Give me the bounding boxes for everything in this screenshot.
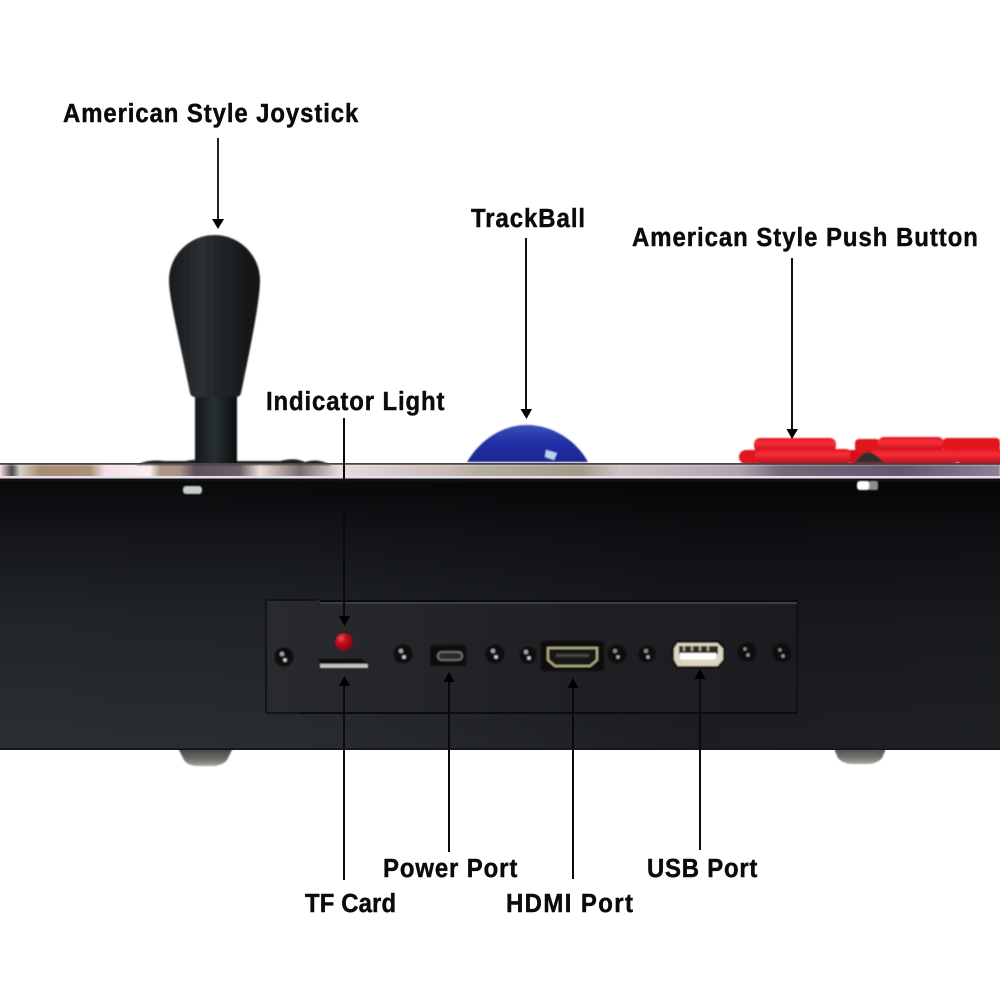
label: USB Port: USB Port xyxy=(647,854,758,883)
button group 2 xyxy=(850,437,1000,464)
port plate xyxy=(266,600,797,714)
USB port xyxy=(673,642,724,667)
arrow: power port xyxy=(444,672,454,852)
joystick shaft xyxy=(195,394,237,466)
red push buttons xyxy=(739,437,1000,464)
arrow: push button xyxy=(786,258,798,439)
joystick ball top xyxy=(169,235,260,397)
trackball xyxy=(467,425,588,462)
console body xyxy=(0,482,1000,750)
joystick xyxy=(136,235,331,468)
button group 1 xyxy=(739,438,853,464)
trackball highlight xyxy=(545,450,557,460)
clip: left xyxy=(183,486,202,494)
small black nut xyxy=(854,452,884,463)
indicator LED xyxy=(335,633,353,651)
arrow: joystick xyxy=(212,138,224,229)
arrow: trackball xyxy=(520,238,532,419)
arrow: indicator light xyxy=(339,418,350,626)
label: TF Card: TF Card xyxy=(305,889,396,918)
top edge strip xyxy=(0,463,1000,482)
arrow: HDMI port xyxy=(568,678,578,879)
clip: right xyxy=(857,481,878,490)
HDMI port xyxy=(541,641,604,671)
TF card slot xyxy=(319,659,368,668)
label: TrackBall: TrackBall xyxy=(471,204,585,233)
label: HDMI Port: HDMI Port xyxy=(506,889,634,918)
power port xyxy=(430,645,466,666)
screws xyxy=(274,642,792,666)
plate upper lip highlight xyxy=(320,602,797,604)
label: American Style Joystick: American Style Joystick xyxy=(63,99,358,128)
label: Indicator Light: Indicator Light xyxy=(266,387,445,416)
arrow: USB port xyxy=(694,669,706,850)
label: American Style Push Button: American Style Push Button xyxy=(632,223,978,252)
label: Power Port: Power Port xyxy=(383,854,518,883)
rubber foot: right xyxy=(832,744,888,764)
joystick base xyxy=(136,459,331,468)
arrow: TF card xyxy=(339,676,350,880)
rubber foot: left xyxy=(178,748,233,766)
